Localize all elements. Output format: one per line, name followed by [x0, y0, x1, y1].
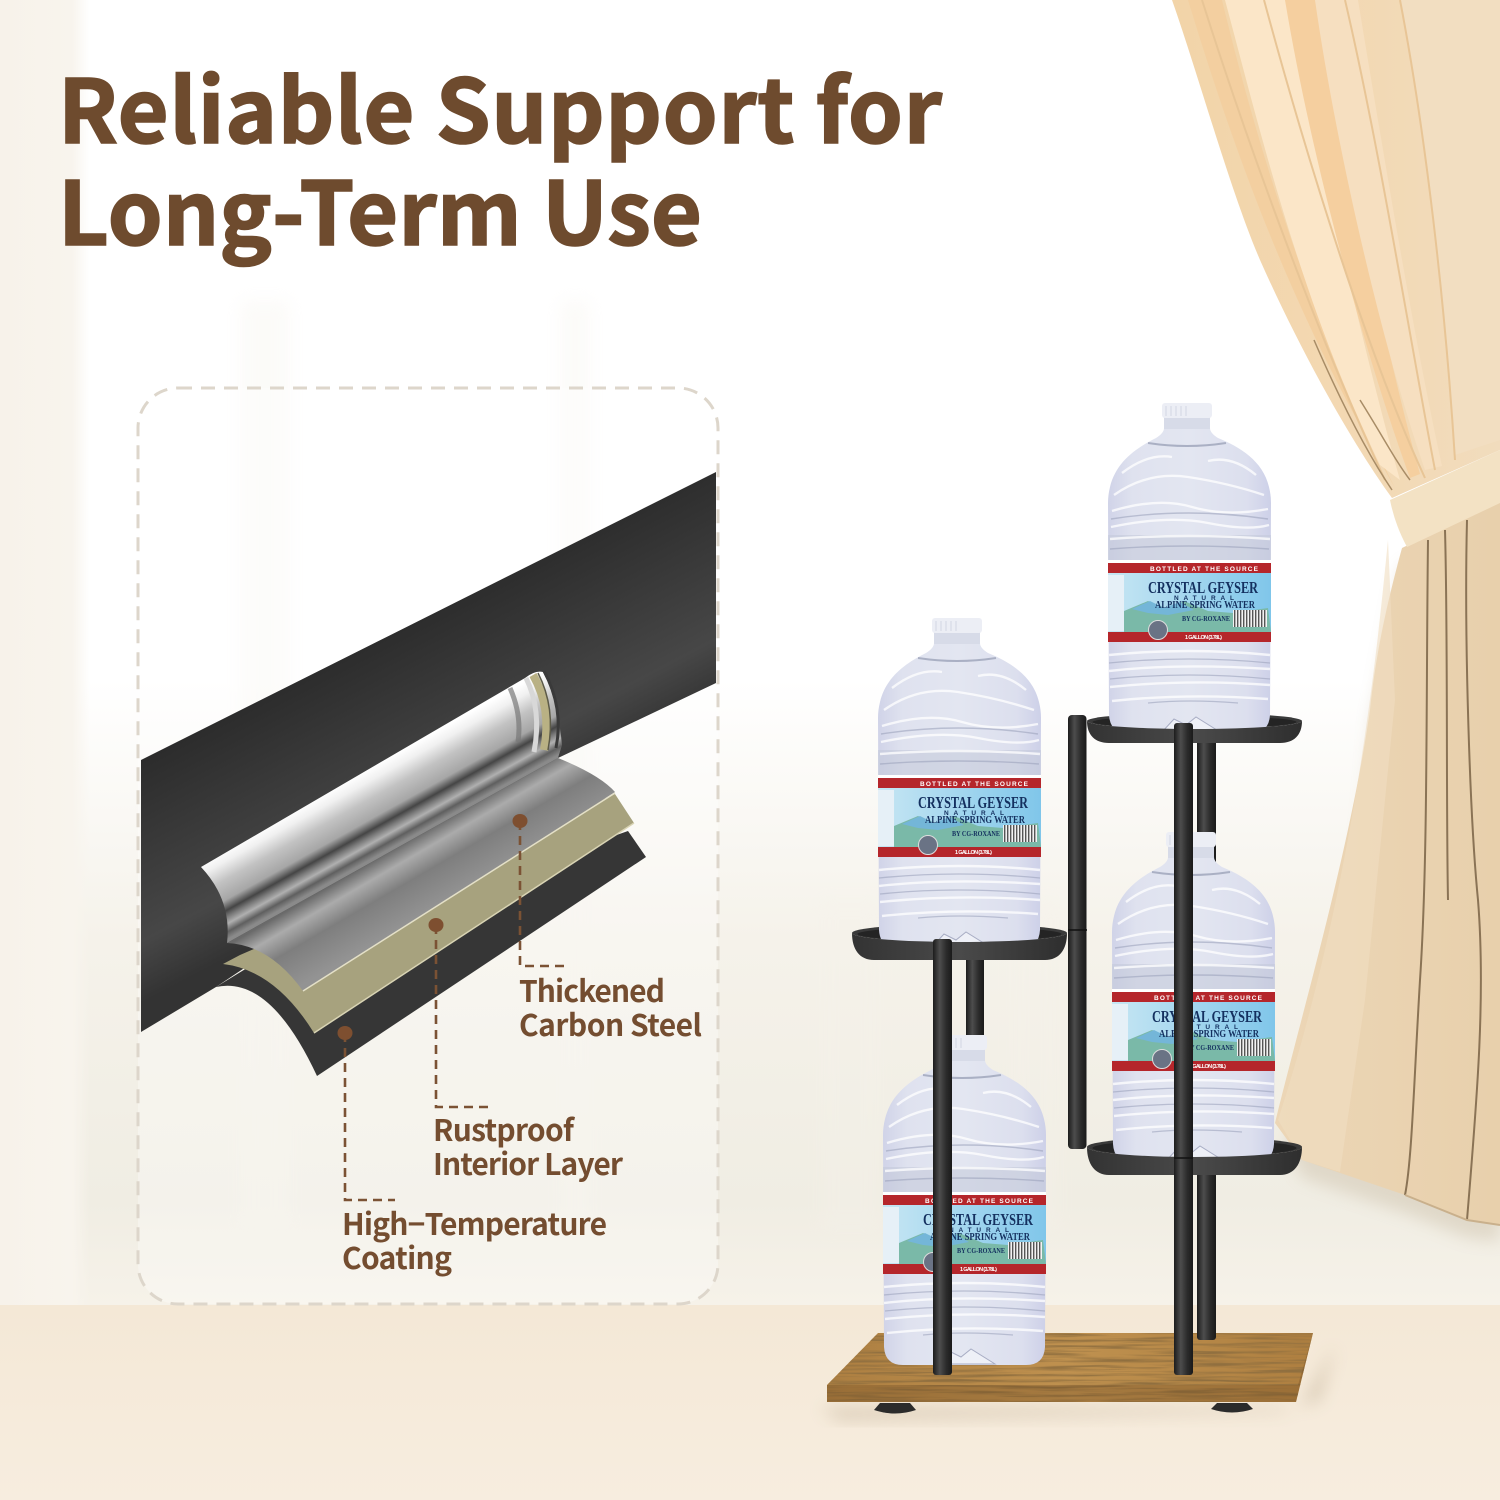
callout: rustproof interior layer — [428, 918, 624, 1184]
floor — [0, 1305, 1500, 1500]
rear posts — [966, 740, 1216, 1340]
bottle: top: NATURAL — [1174, 595, 1234, 602]
sheer curtain folds — [240, 300, 1060, 1230]
bottle: middle left: BOTTLED AT THE SOURCE — [920, 781, 1029, 788]
bottle: bottom: BOTTLED AT THE SOURCE — [925, 1198, 1034, 1205]
tier discs rear — [852, 713, 1302, 1157]
curtain — [1172, 0, 1500, 1242]
panel: tube cross-section — [138, 388, 718, 1304]
callout: rustproof interior layer: Interior Layer — [433, 1140, 624, 1184]
bottle: middle left: 1 GALLON (3.78L) — [955, 850, 992, 856]
title: Long-Term Use — [58, 144, 702, 271]
bottle: bottom: ALPINE SPRING WATER — [930, 1232, 1030, 1243]
bottle: lower right: BY CG-ROXANE — [1186, 1044, 1234, 1052]
bottle: lower right: NATURAL — [1178, 1024, 1238, 1031]
bottle: bottom: NATURAL — [949, 1227, 1009, 1234]
callout: high-temperature coating: Coating — [342, 1234, 452, 1278]
wooden base — [827, 1333, 1313, 1402]
bottle: lower right: BOTTLED AT THE SOURCE — [1154, 995, 1263, 1002]
plant stand with water bottles — [820, 403, 1335, 1420]
callout: rustproof interior layer: Rustproof — [433, 1106, 576, 1150]
callout: high-temperature coating: High−Temperature — [342, 1200, 607, 1244]
bottle: lower right: 1 GALLON (3.78L) — [1189, 1064, 1226, 1070]
bottle: bottom — [883, 1035, 1046, 1365]
bottle: middle left: NATURAL — [944, 810, 1004, 817]
bottle: top — [1108, 403, 1271, 733]
bottle: middle left — [878, 618, 1041, 948]
callout: high-temperature coating — [338, 1026, 607, 1278]
bottle: lower right: CRYSTAL GEYSER — [1152, 1007, 1263, 1026]
bottle: bottom: 1 GALLON (3.78L) — [960, 1267, 997, 1273]
bottle: top: ALPINE SPRING WATER — [1155, 600, 1255, 611]
callout: thickened carbon steel — [512, 814, 702, 1045]
title — [58, 42, 943, 271]
base feet — [874, 1403, 1253, 1414]
tier discs front — [852, 721, 1302, 1175]
callout: thickened carbon steel: Thickened — [519, 967, 665, 1011]
bottle: middle left: CRYSTAL GEYSER — [918, 793, 1029, 812]
bottle: lower right: ALPINE SPRING WATER — [1159, 1029, 1259, 1040]
callout: thickened carbon steel: Carbon Steel — [519, 1001, 702, 1045]
bottle: top: 1 GALLON (3.78L) — [1185, 635, 1222, 641]
bottle: top: CRYSTAL GEYSER — [1148, 578, 1259, 597]
title: Reliable Support for — [58, 42, 943, 169]
bottle: top: BY CG-ROXANE — [1182, 615, 1230, 623]
bottle: lower right — [1112, 832, 1275, 1162]
bottle: bottom: CRYSTAL GEYSER — [923, 1210, 1034, 1229]
bottle: middle left: ALPINE SPRING WATER — [925, 815, 1025, 826]
bottle: top: BOTTLED AT THE SOURCE — [1150, 566, 1259, 573]
left window edge — [0, 0, 90, 1306]
bottle: bottom: BY CG-ROXANE — [957, 1247, 1005, 1255]
front posts — [933, 715, 1193, 1375]
bottle: middle left: BY CG-ROXANE — [952, 830, 1000, 838]
